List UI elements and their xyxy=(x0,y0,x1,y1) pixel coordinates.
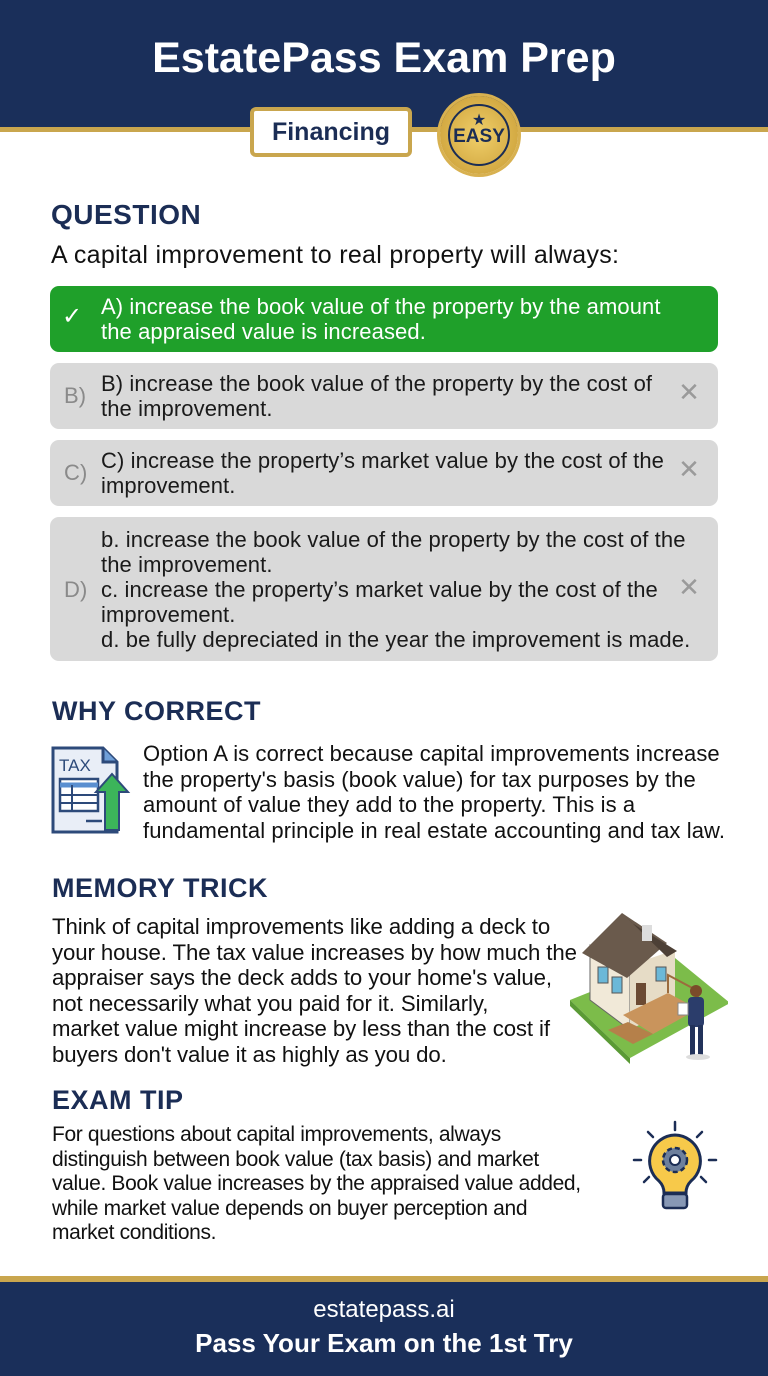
badge: EASY seal xyxy=(440,96,518,174)
exam tip text xyxy=(52,1123,581,1244)
title: EstatePass Exam Prep xyxy=(152,34,616,82)
memory trick text xyxy=(52,914,577,1066)
footer text: Pass Your Exam on the 1st Try xyxy=(195,1328,573,1358)
illustration: house with deck and appraiser xyxy=(570,913,728,1064)
memory trick text: buyers don't value it as highly as you do. xyxy=(52,1042,447,1066)
why correct text: amount of value they add to the property. This is a xyxy=(143,792,635,817)
footer band xyxy=(0,1276,768,1282)
exam tip text: For questions about capital improvements, always xyxy=(52,1123,501,1146)
exam tip text: distinguish between book value (tax basis) and market xyxy=(52,1148,539,1171)
option D: the improvement. xyxy=(101,552,273,577)
option A correct: the appraised value is increased. xyxy=(101,319,426,344)
option D: D) xyxy=(64,577,87,602)
exam tip text: value. Book value increases by the appraised value added, xyxy=(52,1172,581,1195)
option A correct xyxy=(50,286,718,352)
heading: why correct: WHY CORRECT xyxy=(52,696,261,726)
option B: B) xyxy=(64,383,86,408)
option B: ✕ xyxy=(678,377,700,407)
option D xyxy=(50,517,718,661)
option D: ✕ xyxy=(678,572,700,602)
heading: question: QUESTION xyxy=(51,199,201,230)
icon: lightbulb with gear xyxy=(632,1120,718,1210)
exam tip text: while market value depends on buyer perception and xyxy=(52,1197,527,1220)
option A correct: A) increase the book value of the property by the amount xyxy=(101,294,661,319)
icon: tax document xyxy=(52,746,130,834)
memory trick text: Think of capital improvements like adding a deck to xyxy=(52,914,550,939)
option C: C) xyxy=(64,460,87,485)
badge: EASY seal: ★ xyxy=(472,112,486,129)
footer text xyxy=(195,1296,573,1358)
question text: A capital improvement to real property will always: xyxy=(51,241,619,269)
memory trick text: not necessarily what you paid for it. Similarly, xyxy=(52,990,488,1016)
heading: memory trick: MEMORY TRICK xyxy=(52,873,268,903)
header band xyxy=(0,0,768,128)
why correct text: Option A is correct because capital improvements increase xyxy=(143,741,720,766)
option D: c. increase the property’s market value by the cost of the xyxy=(101,577,658,602)
badge: Financing: Financing xyxy=(272,118,390,146)
option C xyxy=(50,440,718,506)
option B xyxy=(50,363,718,429)
badge: EASY seal: EASY xyxy=(453,126,505,147)
badge: Financing xyxy=(250,107,412,157)
footer text: estatepass.ai xyxy=(313,1296,455,1323)
memory trick text: market value might increase by less than the cost if xyxy=(52,1016,550,1041)
option B: B) increase the book value of the property by the cost of xyxy=(101,371,652,396)
option D: b. increase the book value of the property by the cost of the xyxy=(101,527,686,552)
icon: tax document: TAX xyxy=(59,756,91,775)
why correct text: fundamental principle in real estate accounting and tax law. xyxy=(143,818,725,842)
option C: C) increase the property’s market value by the cost of the xyxy=(101,448,664,473)
option D: improvement. xyxy=(101,602,235,627)
option B: the improvement. xyxy=(101,396,273,421)
why correct text: the property's basis (book value) for tax purposes by the xyxy=(143,766,696,792)
option D: d. be fully depreciated in the year the improvement is made. xyxy=(101,627,690,652)
memory trick text: appraiser says the deck adds to your home's value, xyxy=(52,965,552,990)
why correct text xyxy=(143,741,725,842)
memory trick text: your house. The tax value increases by how much the xyxy=(52,940,577,964)
option C: improvement. xyxy=(101,473,235,498)
option C: ✕ xyxy=(678,454,700,484)
option A correct: ✓ xyxy=(62,303,82,330)
exam tip text: market conditions. xyxy=(52,1221,216,1244)
heading: exam tip: EXAM TIP xyxy=(52,1085,184,1115)
